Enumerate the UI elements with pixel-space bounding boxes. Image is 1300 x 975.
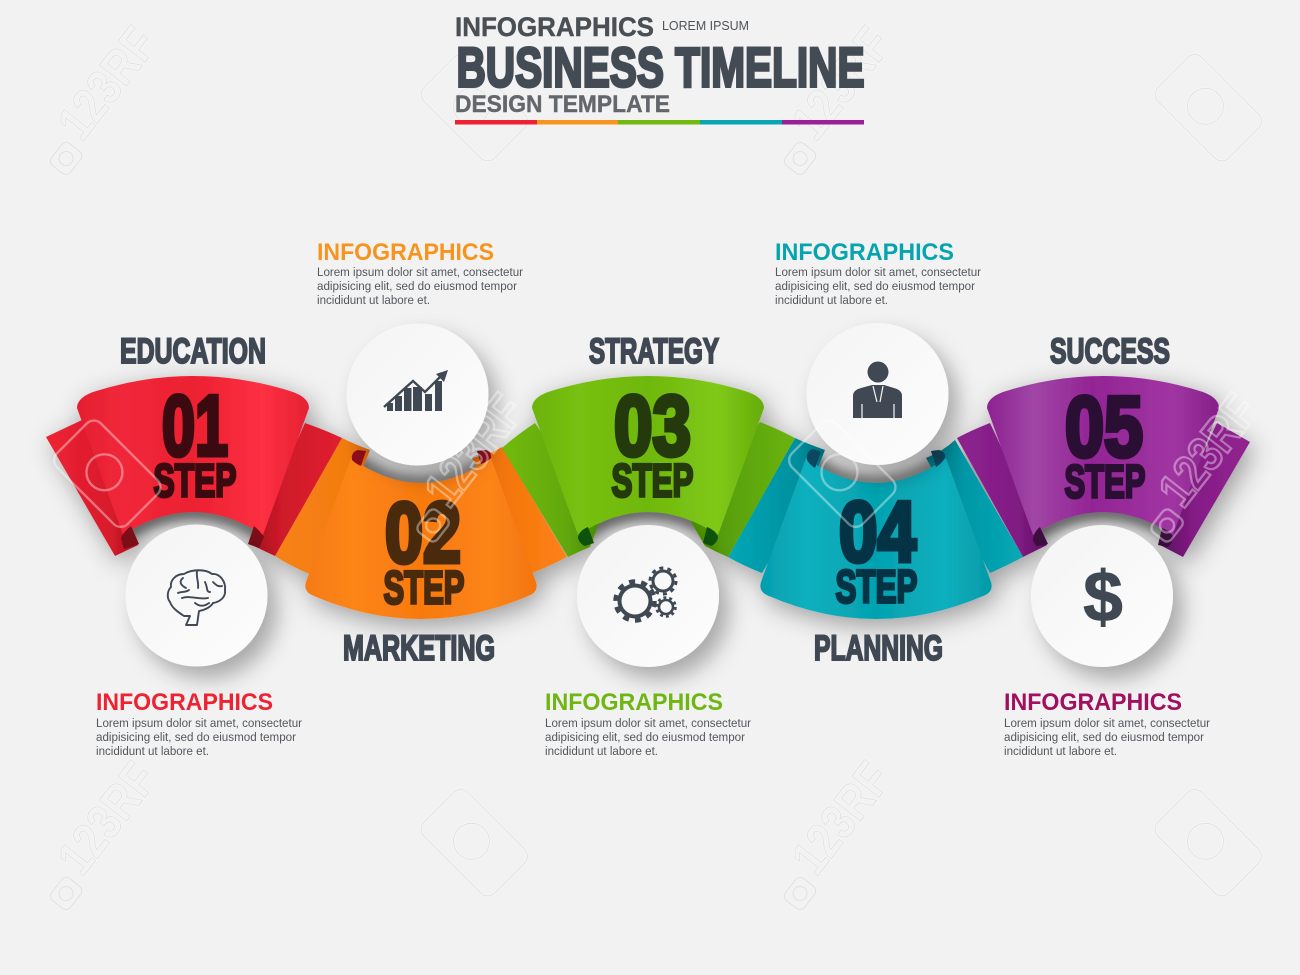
step 02: STEP bbox=[384, 562, 464, 614]
text block top 2 orange: adipisicing elit, sed do eiusmod tempor bbox=[317, 279, 517, 293]
ribbon 3 green bbox=[502, 376, 795, 557]
icon: gears bbox=[616, 568, 676, 620]
text block bottom 3 green: adipisicing elit, sed do eiusmod tempor bbox=[545, 730, 745, 744]
text block bottom 5 magenta: Lorem ipsum dolor sit amet, consectetur bbox=[1004, 716, 1210, 730]
watermarks: 123RF bbox=[781, 752, 902, 885]
step 01 bbox=[154, 379, 236, 506]
text block bottom 3 green bbox=[545, 689, 751, 758]
circle 1 with brain icon bbox=[126, 524, 268, 666]
circle 5 with dollar icon bbox=[1031, 525, 1173, 667]
watermarks: 123RF bbox=[781, 17, 902, 150]
label marketing: MARKETING bbox=[343, 629, 495, 668]
text block bottom 1 red bbox=[96, 689, 302, 758]
title: business timeline: BUSINESS TIMELINE bbox=[456, 36, 864, 98]
label success: SUCCESS bbox=[1050, 332, 1170, 371]
label education: EDUCATION bbox=[120, 332, 266, 371]
title block bbox=[455, 12, 864, 124]
watermarks: 123RF bbox=[781, 17, 902, 150]
title: design template: DESIGN TEMPLATE bbox=[455, 91, 670, 118]
step 02 bbox=[384, 486, 464, 614]
step 04 bbox=[836, 485, 918, 612]
step 05: STEP bbox=[1064, 456, 1146, 508]
title: lorem ipsum: LOREM IPSUM bbox=[662, 18, 749, 33]
text block top 2 orange: INFOGRAPHICS bbox=[317, 239, 494, 266]
title: infographics: INFOGRAPHICS bbox=[455, 12, 654, 42]
text block bottom 3 green: incididunt ut labore et. bbox=[545, 744, 658, 758]
step numbers bbox=[154, 379, 1146, 614]
text block bottom 1 red: INFOGRAPHICS bbox=[96, 689, 273, 716]
text block top 2 orange bbox=[317, 239, 523, 307]
text block bottom 1 red: incididunt ut labore et. bbox=[96, 744, 209, 758]
step 01: 01 bbox=[162, 379, 228, 474]
text block top 4 teal: INFOGRAPHICS bbox=[775, 239, 954, 266]
text block top 4 teal: incididunt ut labore et. bbox=[775, 293, 888, 307]
text block top 4 teal bbox=[775, 239, 981, 307]
watermarks: 123RF bbox=[47, 752, 168, 885]
text block top 4 teal: Lorem ipsum dolor sit amet, consectetur bbox=[775, 265, 981, 279]
text block bottom 5 magenta: INFOGRAPHICS bbox=[1004, 689, 1182, 716]
label strategy: STRATEGY bbox=[589, 332, 719, 371]
step 05 bbox=[1064, 380, 1146, 508]
text block bottom 5 magenta bbox=[1004, 689, 1210, 758]
icon: dollar: $ bbox=[1083, 558, 1123, 637]
text block top 2 orange: Lorem ipsum dolor sit amet, consectetur bbox=[317, 265, 523, 279]
text block bottom 1 red: adipisicing elit, sed do eiusmod tempor bbox=[96, 730, 296, 744]
circle 2 with growth chart icon bbox=[346, 324, 488, 466]
circle 4 with businessman icon bbox=[806, 323, 948, 465]
step 03: STEP bbox=[612, 454, 694, 506]
step 02: 02 bbox=[385, 486, 461, 581]
watermarks over ribbons: 123RF bbox=[1148, 384, 1269, 517]
text block top 2 orange: incididunt ut labore et. bbox=[317, 293, 430, 307]
watermarks: 123RF bbox=[47, 752, 168, 885]
icon: growth chart bbox=[384, 370, 448, 411]
ribbon 1 red bbox=[46, 376, 342, 556]
text block bottom 5 magenta: incididunt ut labore et. bbox=[1004, 744, 1117, 758]
watermarks over ribbons: 123RF bbox=[414, 384, 535, 517]
title colour bar bbox=[455, 120, 864, 124]
step 04: STEP bbox=[836, 560, 918, 612]
watermarks: 123RF bbox=[47, 17, 168, 150]
label planning: PLANNING bbox=[814, 629, 943, 668]
icon: businessman bbox=[853, 362, 902, 418]
arc shadows behind ribbons bbox=[123, 458, 1173, 535]
ribbon 2 orange bbox=[275, 438, 567, 619]
text block bottom 5 magenta: adipisicing elit, sed do eiusmod tempor bbox=[1004, 730, 1204, 744]
step 03 bbox=[612, 379, 694, 506]
ribbon 5 purple bbox=[957, 376, 1250, 557]
text block bottom 3 green: INFOGRAPHICS bbox=[545, 689, 723, 716]
text block top 4 teal: adipisicing elit, sed do eiusmod tempor bbox=[775, 279, 975, 293]
ribbon 4 teal bbox=[728, 438, 1023, 619]
watermarks over ribbons bbox=[50, 384, 1269, 545]
step 04: 04 bbox=[839, 485, 916, 580]
step 03: 03 bbox=[614, 379, 691, 474]
watermarks: 123RF bbox=[47, 17, 168, 150]
category labels bbox=[120, 332, 1170, 668]
circle 3 with gears icon bbox=[577, 525, 719, 667]
step 01: STEP bbox=[154, 454, 236, 506]
text block bottom 3 green: Lorem ipsum dolor sit amet, consectetur bbox=[545, 716, 751, 730]
step 05: 05 bbox=[1065, 380, 1143, 475]
ribbon timeline bbox=[46, 376, 1250, 619]
watermarks: 123RF bbox=[781, 752, 902, 885]
icon: brain bbox=[168, 570, 225, 625]
text block bottom 1 red: Lorem ipsum dolor sit amet, consectetur bbox=[96, 716, 302, 730]
